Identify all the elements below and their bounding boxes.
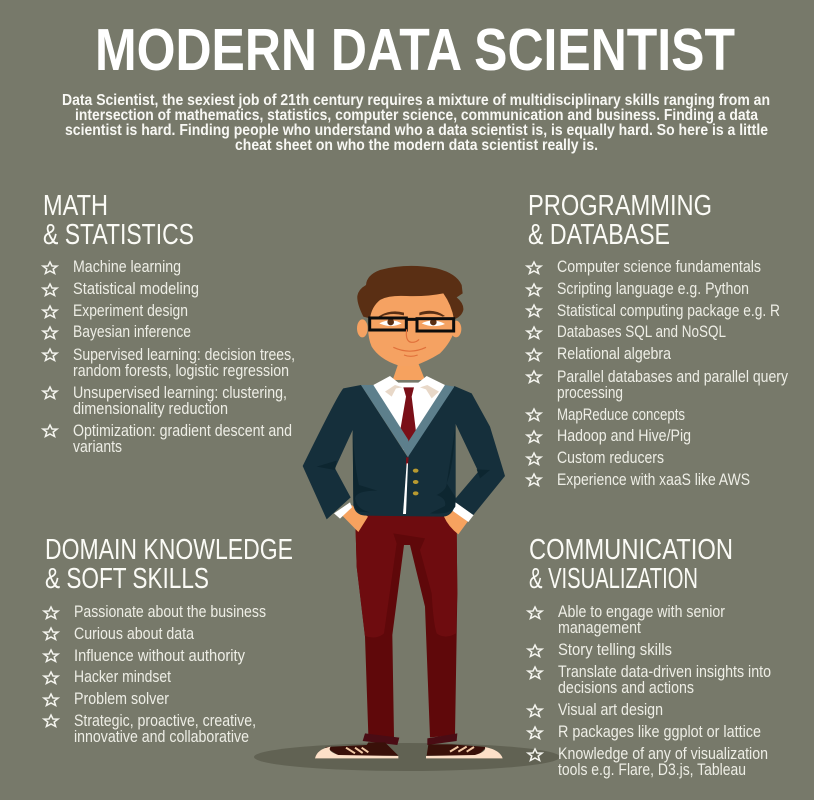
- skills list: Hadoop and Hive/Pig: [557, 427, 691, 445]
- illustration: data scientist figure: [303, 266, 505, 758]
- trousers: [355, 508, 457, 737]
- skills list: R packages like ggplot or lattice: [558, 723, 761, 741]
- skills list: [558, 603, 771, 779]
- skills list: tools e.g. Flare, D3.js, Tableau: [558, 761, 746, 779]
- heading: programming and database: PROGRAMMING: [528, 190, 712, 222]
- star bullets: [43, 262, 57, 436]
- skills list: [73, 258, 295, 456]
- jacket: [303, 385, 505, 519]
- skills list: Optimization: gradient descent and: [73, 422, 292, 440]
- skills list: Visual art design: [558, 701, 663, 719]
- head: [357, 266, 463, 366]
- skills list: Curious about data: [74, 625, 195, 643]
- glasses: [370, 318, 454, 331]
- heading: communication and visualization: COMMUNICATION: [529, 534, 733, 566]
- panel: programming and database: [527, 190, 789, 489]
- torso and arms: [303, 363, 505, 534]
- heading: programming and database: & DATABASE: [528, 219, 670, 251]
- skills list: processing: [557, 384, 623, 402]
- hair: [357, 266, 463, 319]
- nose and mouth: [406, 329, 419, 342]
- skills list: Strategic, proactive, creative,: [74, 712, 256, 730]
- skills list: Knowledge of any of visualization: [558, 745, 768, 763]
- skills list: Databases SQL and NoSQL: [557, 323, 726, 341]
- ears: [357, 319, 368, 337]
- heading: domain knowledge and soft skills: [45, 534, 293, 595]
- skills list: Custom reducers: [557, 449, 664, 467]
- skills list: Machine learning: [73, 258, 181, 276]
- heading: domain knowledge and soft skills: DOMAIN KNOWLEDGE: [45, 534, 293, 566]
- skills list: Statistical modeling: [73, 280, 199, 298]
- skills list: Hacker mindset: [74, 668, 171, 686]
- panel: communication and visualization: [528, 534, 771, 779]
- heading: communication and visualization: [529, 534, 733, 595]
- skills list: Bayesian inference: [73, 323, 191, 341]
- intro paragraph: cheat sheet on who the modern data scientist really is.: [235, 137, 598, 154]
- skills list: management: [558, 619, 641, 637]
- skills list: innovative and collaborative: [74, 728, 249, 746]
- heading: domain knowledge and soft skills: & SOFT SKILLS: [45, 563, 209, 595]
- skills list: Experience with xaaS like AWS: [557, 471, 750, 489]
- hands: [342, 505, 368, 532]
- skills list: Passionate about the business: [74, 603, 266, 621]
- lapels: [361, 385, 408, 457]
- skills list: Influence without authority: [74, 647, 246, 665]
- skills list: MapReduce concepts: [557, 406, 685, 424]
- star bullets: [528, 607, 542, 760]
- neck: [393, 363, 425, 380]
- heading: math and statistics: MATH: [43, 190, 108, 222]
- heading: math and statistics: & STATISTICS: [43, 219, 194, 251]
- skills list: Computer science fundamentals: [557, 258, 761, 276]
- heading: programming and database: [528, 190, 712, 251]
- star bullets: [44, 607, 58, 726]
- skills list: Experiment design: [73, 302, 188, 320]
- buttons: [413, 469, 418, 473]
- heading: communication and visualization: & VISUALIZATION: [529, 563, 698, 595]
- skills list: Relational algebra: [557, 345, 672, 363]
- skills list: Translate data-driven insights into: [558, 663, 771, 681]
- skills list: Supervised learning: decision trees,: [73, 346, 295, 364]
- panel: math and statistics: [43, 190, 295, 456]
- star bullets: [527, 262, 541, 486]
- skills list: [557, 258, 789, 489]
- heading: math and statistics: [43, 190, 194, 251]
- skills list: Able to engage with senior: [558, 603, 725, 621]
- shirt: [373, 376, 445, 450]
- skills list: dimensionality reduction: [73, 400, 228, 418]
- skills list: random forests, logistic regression: [73, 362, 289, 380]
- skills list: decisions and actions: [558, 679, 694, 697]
- shoes and cuffs: [315, 733, 503, 758]
- face: [368, 292, 455, 366]
- skills list: Scripting language e.g. Python: [557, 280, 749, 298]
- tie: [400, 387, 416, 447]
- eyebrows: [377, 311, 404, 317]
- panel: domain knowledge and soft skills: [44, 534, 293, 746]
- skills list: Story telling skills: [558, 641, 672, 659]
- intro paragraph: [62, 92, 770, 154]
- ground shadow: [254, 743, 560, 771]
- skills list: [74, 603, 266, 746]
- skills list: Problem solver: [74, 690, 169, 708]
- skills list: Unsupervised learning: clustering,: [73, 384, 287, 402]
- skills list: variants: [73, 438, 122, 456]
- cuffs: [334, 502, 352, 519]
- eyes: [379, 320, 402, 326]
